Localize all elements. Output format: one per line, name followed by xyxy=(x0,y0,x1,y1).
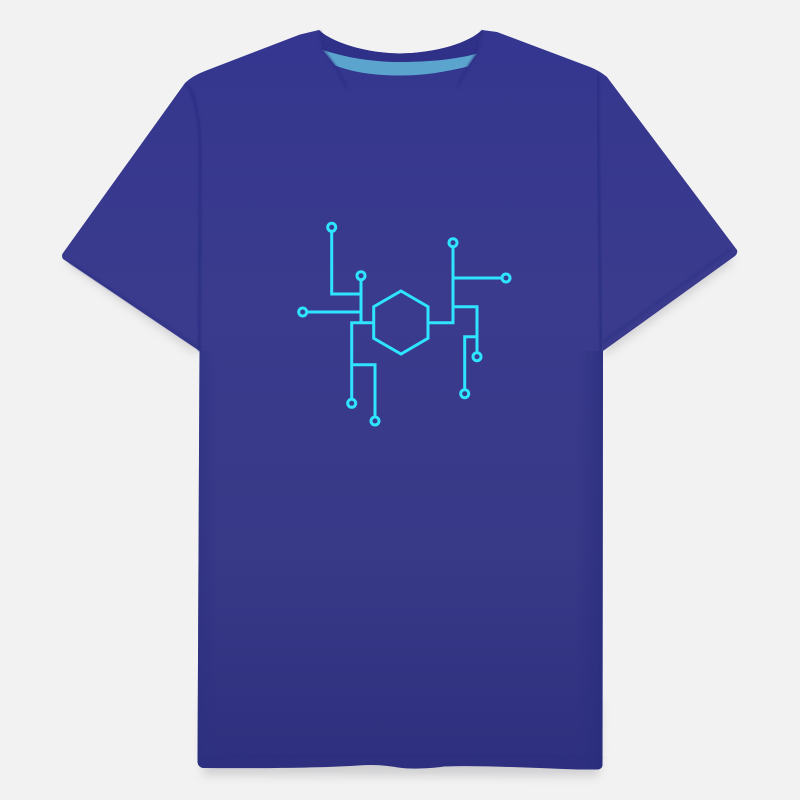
right collar seam xyxy=(457,31,482,88)
right sleeve hem xyxy=(603,250,730,342)
left sleeve hem xyxy=(70,262,199,348)
right traces xyxy=(428,247,501,389)
shirt shadow xyxy=(66,250,733,776)
right sleeve seam xyxy=(598,74,601,351)
central hexagon xyxy=(374,291,428,354)
inner collar xyxy=(319,30,482,76)
neck tape xyxy=(322,50,477,76)
t-shirt xyxy=(62,30,737,770)
left collar seam xyxy=(320,31,347,88)
left sleeve seam xyxy=(187,84,200,351)
left traces xyxy=(307,231,375,416)
terminal nodes xyxy=(299,223,510,425)
side shading xyxy=(198,351,603,770)
shirt body and sleeves xyxy=(62,30,737,770)
bottom hem xyxy=(199,755,602,758)
circuit graphic xyxy=(299,223,510,425)
